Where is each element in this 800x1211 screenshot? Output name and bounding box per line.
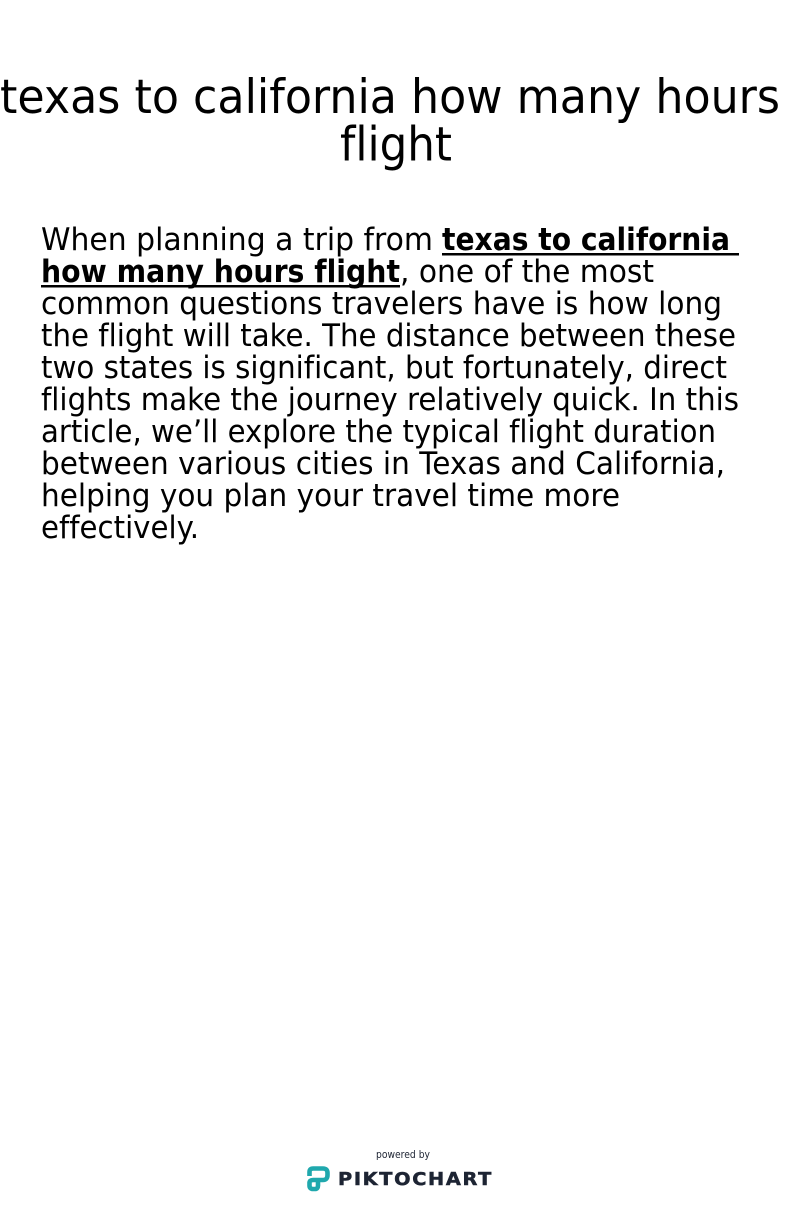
intro paragraph: texas to california (442, 222, 730, 258)
intro paragraph (41, 222, 739, 546)
footer: powered by Piktochart (310, 1149, 493, 1190)
intro paragraph: two states is significant, but fortunately, direct (41, 350, 727, 386)
icon: Piktochart logo mark (310, 1168, 328, 1189)
title (0, 70, 780, 172)
intro paragraph: the flight will take. The distance between these (41, 318, 736, 354)
intro paragraph: between various cities in Texas and California, (41, 446, 725, 482)
intro paragraph: flights make the journey relatively quick. In this (41, 382, 739, 418)
intro paragraph: how many hours flight (41, 254, 400, 290)
intro paragraph: , one of the most (400, 254, 654, 290)
intro paragraph: common questions travelers have is how long (41, 286, 722, 322)
intro paragraph: article, we’ll explore the typical flight duration (41, 414, 716, 450)
intro paragraph: effectively. (41, 510, 199, 546)
powered by label: powered by (376, 1149, 430, 1161)
intro paragraph: helping you plan your travel time more (41, 478, 620, 514)
title: flight (340, 118, 452, 172)
logo wordmark: PIKTOCHART (338, 1170, 493, 1190)
intro paragraph: When planning a trip from (41, 222, 433, 258)
